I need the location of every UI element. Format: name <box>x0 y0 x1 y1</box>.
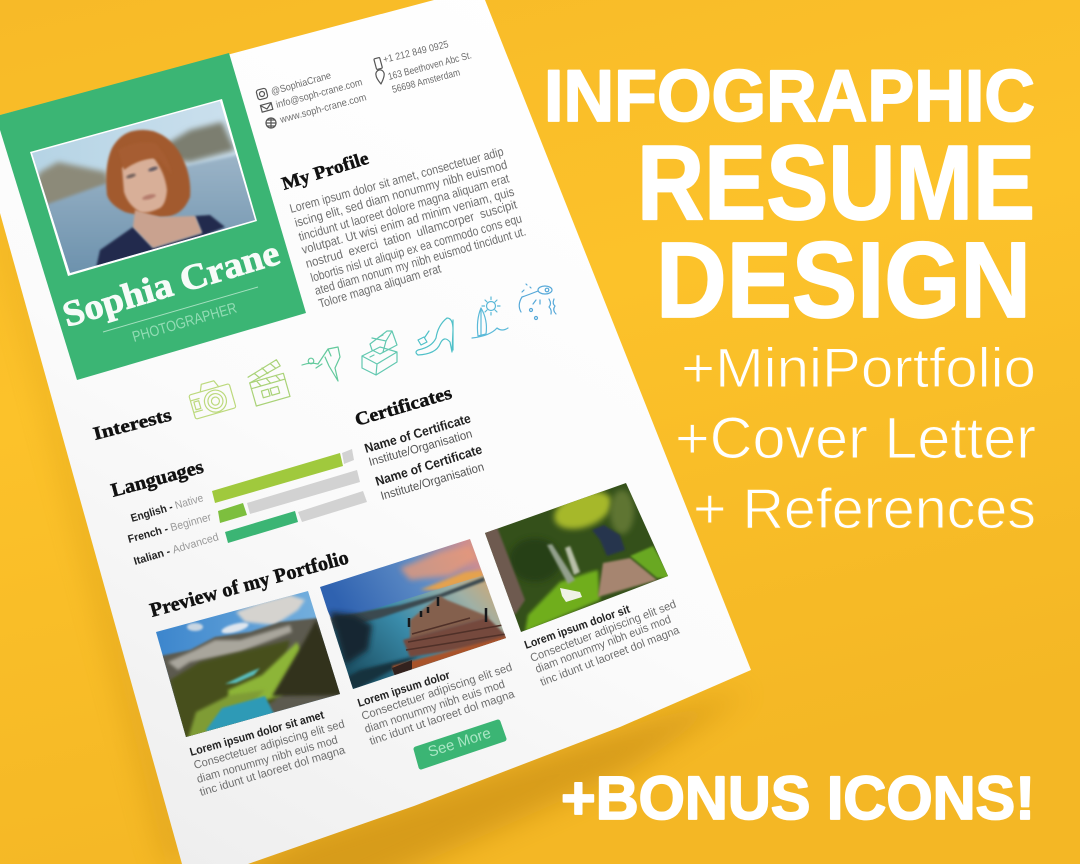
language labels: French - Beginner <box>127 511 213 546</box>
caption 2: Lorem ipsum dolor <box>356 669 452 710</box>
profile text: tincidunt ut laoreet dolore magna aliquam erat <box>297 171 511 244</box>
profile text: iscing elit, sed diam nonummy nibh euismod <box>293 158 509 230</box>
contact details <box>256 39 473 128</box>
extras list: + References <box>693 477 1036 541</box>
icon: bricks <box>362 331 397 375</box>
caption 3: Lorem ipsum dolor sit <box>523 604 632 652</box>
title: infographic resume design: RESUME <box>637 124 1035 242</box>
paper sheet <box>0 0 751 864</box>
bar: italian <box>225 491 367 543</box>
icon: clapperboard <box>246 359 290 406</box>
caption 2: diam nonummy nibh euis mod <box>363 679 507 736</box>
contact: email: info@soph-crane.com <box>275 77 364 111</box>
name: Sophia Crane <box>58 232 284 335</box>
icon: camera <box>187 377 236 419</box>
caption 2: tinc idunt ut laoreet dol magna <box>368 688 517 748</box>
photo: lake dock at sunset <box>320 539 506 689</box>
icon: surfboard and sun <box>472 297 508 338</box>
language labels: Italian - Advanced <box>132 531 220 568</box>
certificate 2 name: Name of Certificate <box>373 442 484 489</box>
contact: handle: @SophiaCrane <box>270 70 333 98</box>
certificate 1 name: Name of Certificate <box>363 411 472 456</box>
profile text: Lorem ipsum dolor sit amet, consectetuer adip <box>288 144 505 216</box>
caption 2: Consectetuer adipiscing elit sed <box>360 662 514 723</box>
icon: mail <box>260 103 273 112</box>
profile text <box>288 144 527 311</box>
icon: pin <box>376 70 384 84</box>
panel: green profile block <box>0 53 306 380</box>
certificates list <box>363 411 486 503</box>
title: infographic resume design <box>544 56 1035 340</box>
icon: instagram <box>256 88 268 100</box>
caption 3: Consectetuer adipiscing elit sed <box>529 599 678 665</box>
icon: globe <box>266 118 276 128</box>
caption 3 <box>523 599 682 689</box>
contact: city: 56698 Amsterdam <box>391 67 461 96</box>
extras list: +Cover Letter <box>675 406 1036 471</box>
icon: high heel <box>416 318 453 355</box>
paper shadow <box>0 200 750 864</box>
icon: phone <box>374 57 382 70</box>
caption 1: tinc idunt ut laoreet dol magna <box>198 744 347 799</box>
bar: french <box>218 470 360 523</box>
caption 1: Consectetuer adipiscing elit sed <box>193 718 346 772</box>
caption 3: tinc idunt ut laoreet dol magna <box>539 624 682 689</box>
profile text: Tolore magna aliquam erat <box>317 261 443 311</box>
caption 3: diam nonummy nibh euis mod <box>534 614 673 676</box>
certificate 2 institute: Institute/Organisation <box>379 460 486 503</box>
button: see more: See More <box>426 725 493 761</box>
button: see more <box>416 722 504 767</box>
extras list <box>675 336 1036 541</box>
language labels: English - Native <box>129 492 205 525</box>
profile text: ated diam nonum my nibh euismod tincidunt ut. <box>313 224 527 298</box>
profile text: nostrud exerci tation ullamcorper suscipit <box>304 197 519 271</box>
portrait photo <box>30 99 257 276</box>
heading: my profile: My Profile <box>280 149 371 195</box>
contact: website: www.soph-crane.com <box>278 92 368 126</box>
interests icons <box>187 284 556 419</box>
job title: PHOTOGRAPHER <box>130 300 239 346</box>
profile text: lobortis nisl ut aliquip ex ea commodo cons equ <box>309 211 523 285</box>
contact: street: 163 Beethoven Abc St. <box>387 50 473 83</box>
certificate 1 institute: Institute/Organisation <box>367 426 474 469</box>
language bars <box>212 449 367 543</box>
heading: interests: Interests <box>91 406 174 445</box>
caption 1: diam nonummy nibh euis mod <box>196 734 339 786</box>
caption 1: Lorem ipsum dolor sit amet <box>189 709 326 759</box>
photo: mountain lake <box>156 591 340 737</box>
heading: certificates: Certificates <box>353 384 454 431</box>
caption 1 <box>189 709 347 799</box>
photo: forest path <box>485 483 668 632</box>
icon: yoga figure <box>302 347 340 381</box>
heading: portfolio preview: Preview of my Portfolio <box>148 547 351 622</box>
name underline <box>103 287 258 332</box>
heading: languages: Languages <box>109 457 206 502</box>
extras list: +MiniPortfolio <box>681 336 1036 399</box>
icon: sea creatures <box>519 284 556 320</box>
language labels <box>127 492 220 568</box>
caption 2 <box>356 662 517 748</box>
contact: phone: +1 212 849 0925 <box>382 39 450 66</box>
title: infographic resume design: INFOGRAPHIC <box>544 56 1035 137</box>
bonus icons callout: +BONUS ICONS! <box>561 764 1035 832</box>
profile text: volutpat. Ut wisi enim ad minim veniam, quis <box>300 185 516 257</box>
bar: english <box>212 449 354 503</box>
title: infographic resume design: DESIGN <box>656 219 1031 340</box>
